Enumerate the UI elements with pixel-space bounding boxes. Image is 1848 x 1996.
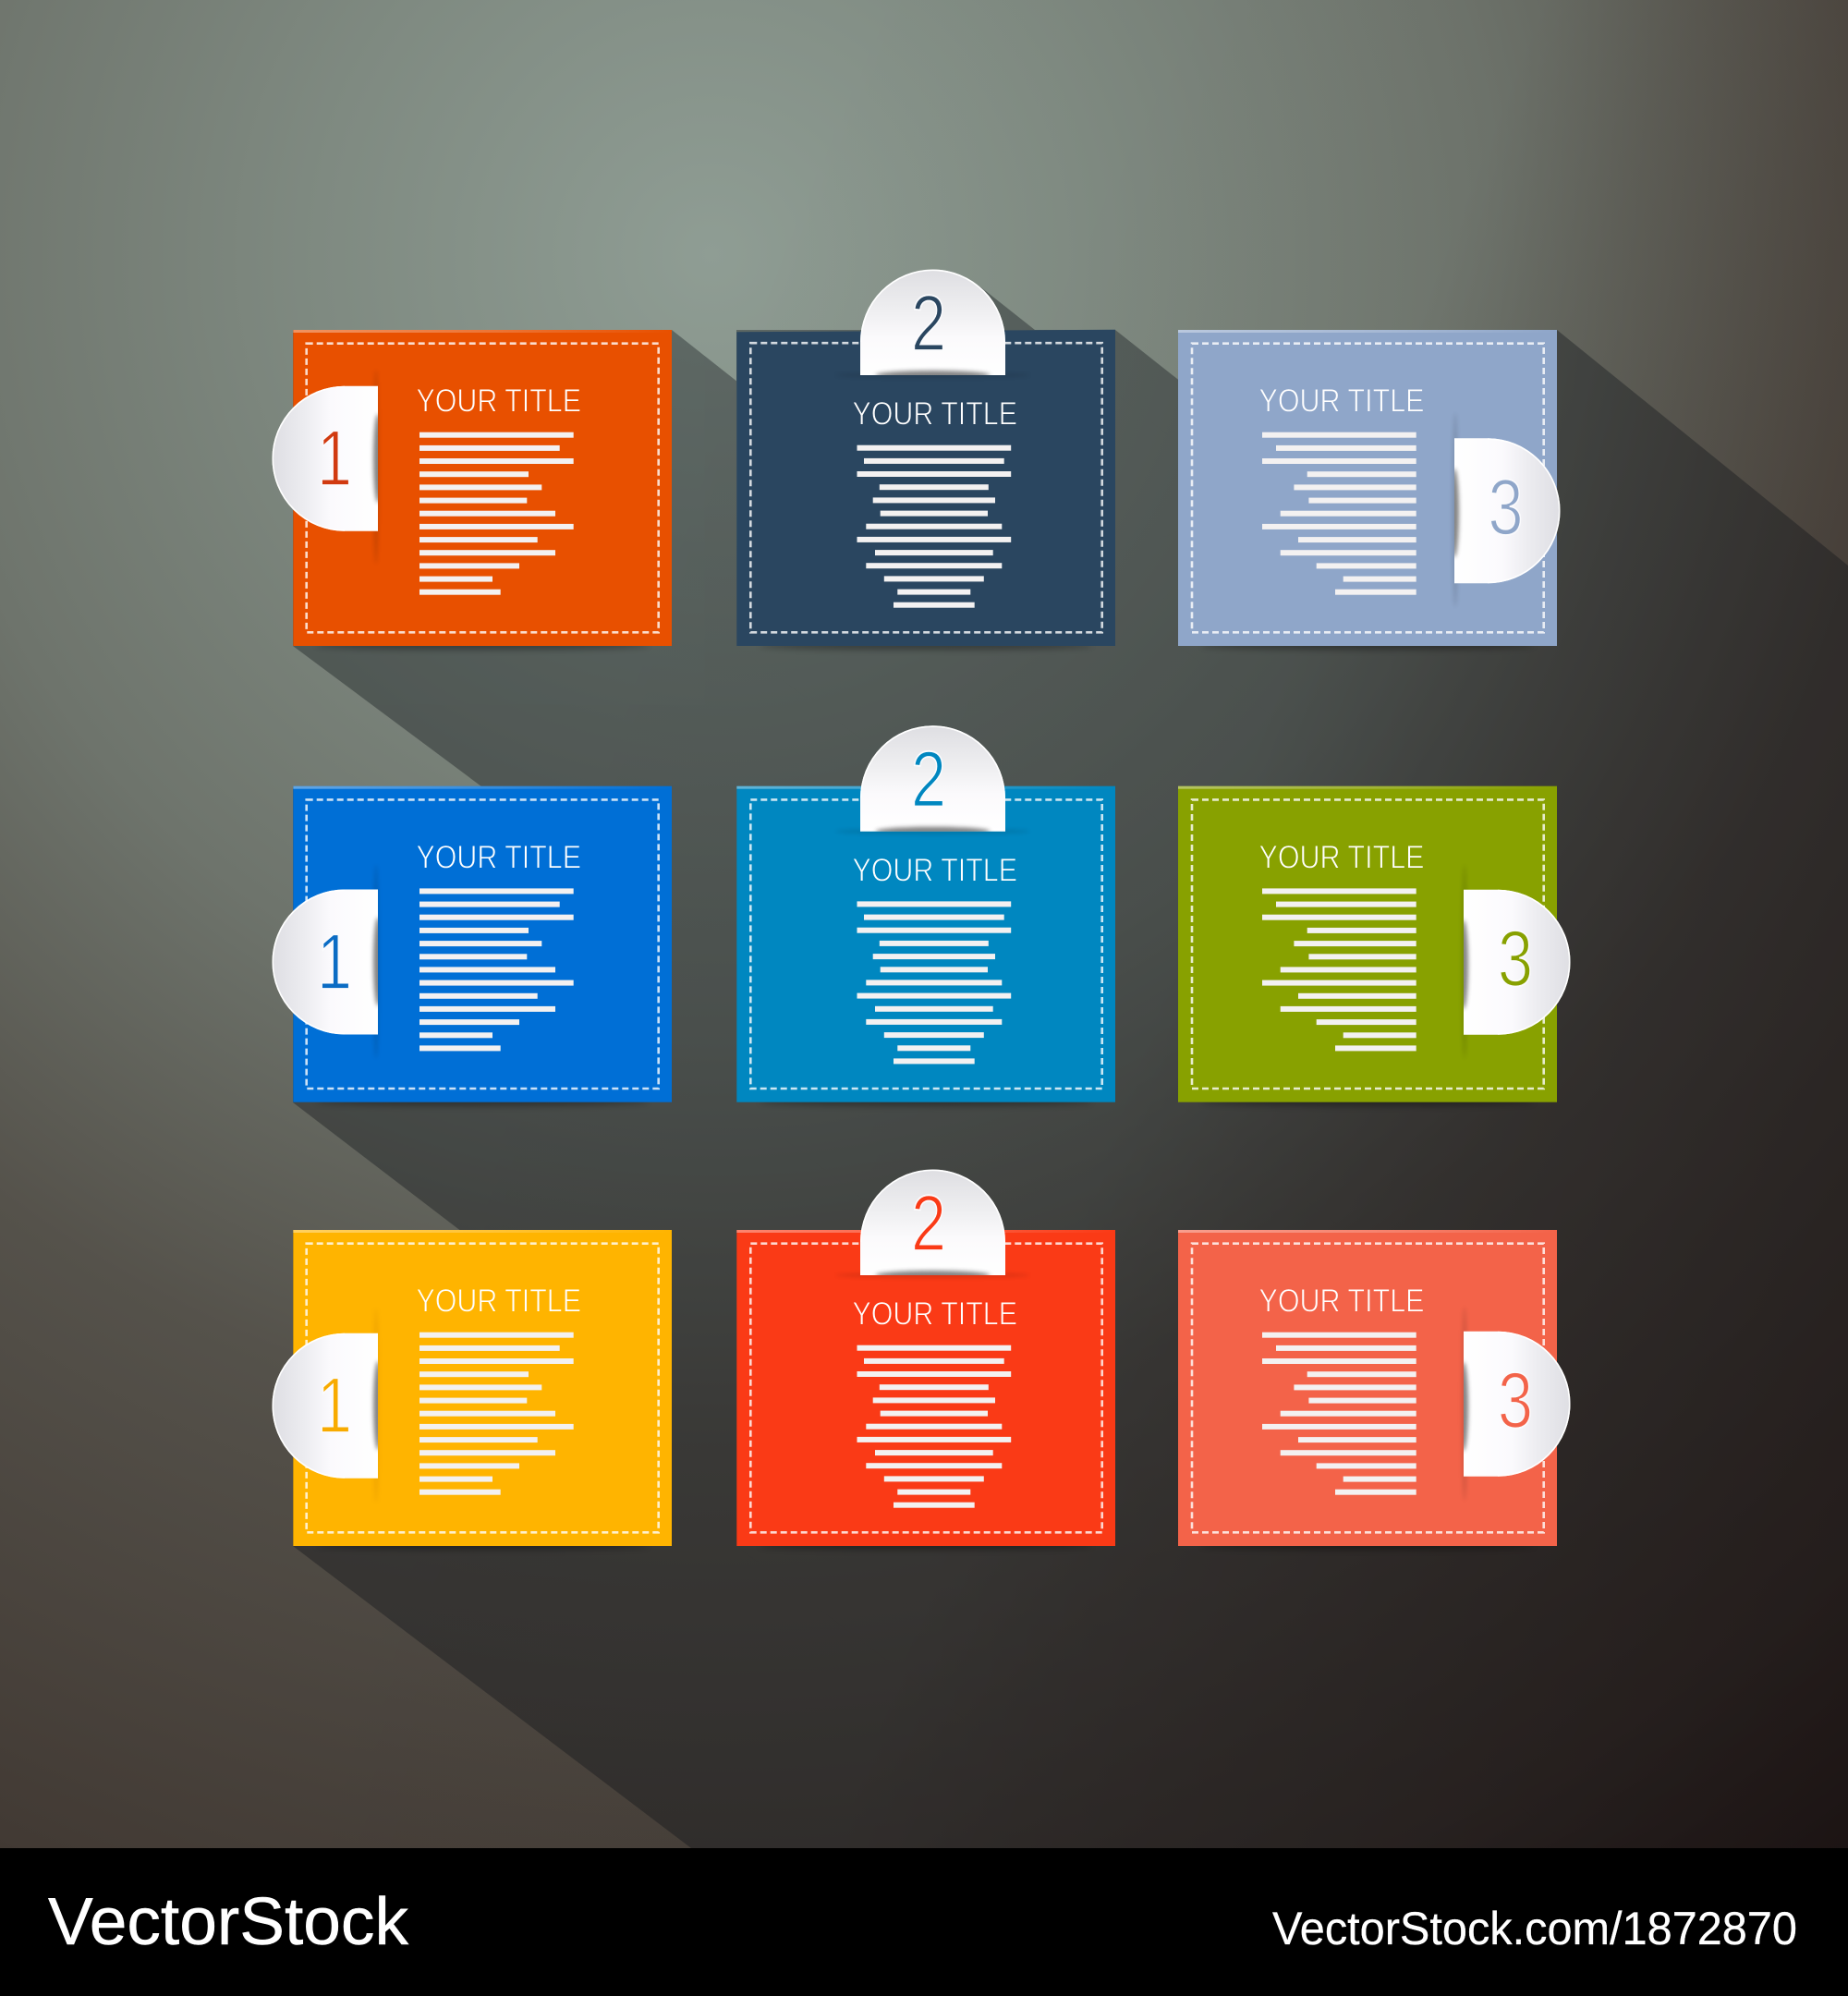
panel: teal-blue card, step 2 [736,725,1115,1106]
title: YOUR TITLE [416,839,581,875]
title: YOUR TITLE [1258,839,1425,875]
number tab 1: 1 [317,415,352,503]
title: YOUR TITLE [852,396,1017,432]
panel: olive green card, step 3 [1178,786,1571,1106]
title: YOUR TITLE [416,1284,581,1320]
number tab 1 [273,865,383,1059]
title: YOUR TITLE [852,852,1017,888]
footer banner [0,1848,1848,1996]
number tab 1: 1 [317,919,352,1006]
number tab 1: 1 [317,1362,352,1450]
panel: red card, step 2 [736,1170,1115,1550]
text lines [1262,432,1416,595]
panel: orange card, step 1 [273,330,672,650]
text lines [1262,1333,1416,1495]
text lines [419,1333,574,1495]
text lines [857,901,1011,1064]
number tab 1 [273,370,383,564]
panel: periwinkle card, step 3 [1178,330,1560,650]
number tab 3 [1459,1307,1571,1501]
text lines [1262,888,1416,1051]
number tab 3: 3 [1498,1357,1533,1445]
number tab 2 [835,1170,1029,1280]
title: YOUR TITLE [1258,1284,1425,1320]
panel: blue card, step 1 [273,786,672,1106]
number tab 2: 2 [911,736,946,824]
panel: coral card, step 3 [1178,1230,1571,1550]
number tab 2: 2 [911,280,946,368]
text lines [419,888,574,1051]
number tab 3 [1450,413,1560,607]
number tab 2: 2 [911,1180,946,1268]
long diagonal shadows [293,285,1848,1848]
text lines [857,445,1011,608]
title: YOUR TITLE [1258,383,1425,420]
number tab 3: 3 [1498,916,1533,1004]
brand name: VectorStock [48,1885,409,1959]
number tab 2 [835,725,1029,836]
title: YOUR TITLE [852,1296,1017,1333]
title: YOUR TITLE [416,383,581,420]
number tab 2 [860,270,1005,377]
number tab 1 [272,1327,379,1484]
number tab 3 [1459,865,1571,1059]
image URL: VectorStock.com/1872870 [1272,1903,1797,1954]
text lines [419,432,574,595]
panel: amber card, step 1 [273,1230,672,1550]
number tab 3: 3 [1488,464,1523,552]
panel: navy card, step 2 [736,270,1115,650]
text lines [857,1345,1011,1508]
